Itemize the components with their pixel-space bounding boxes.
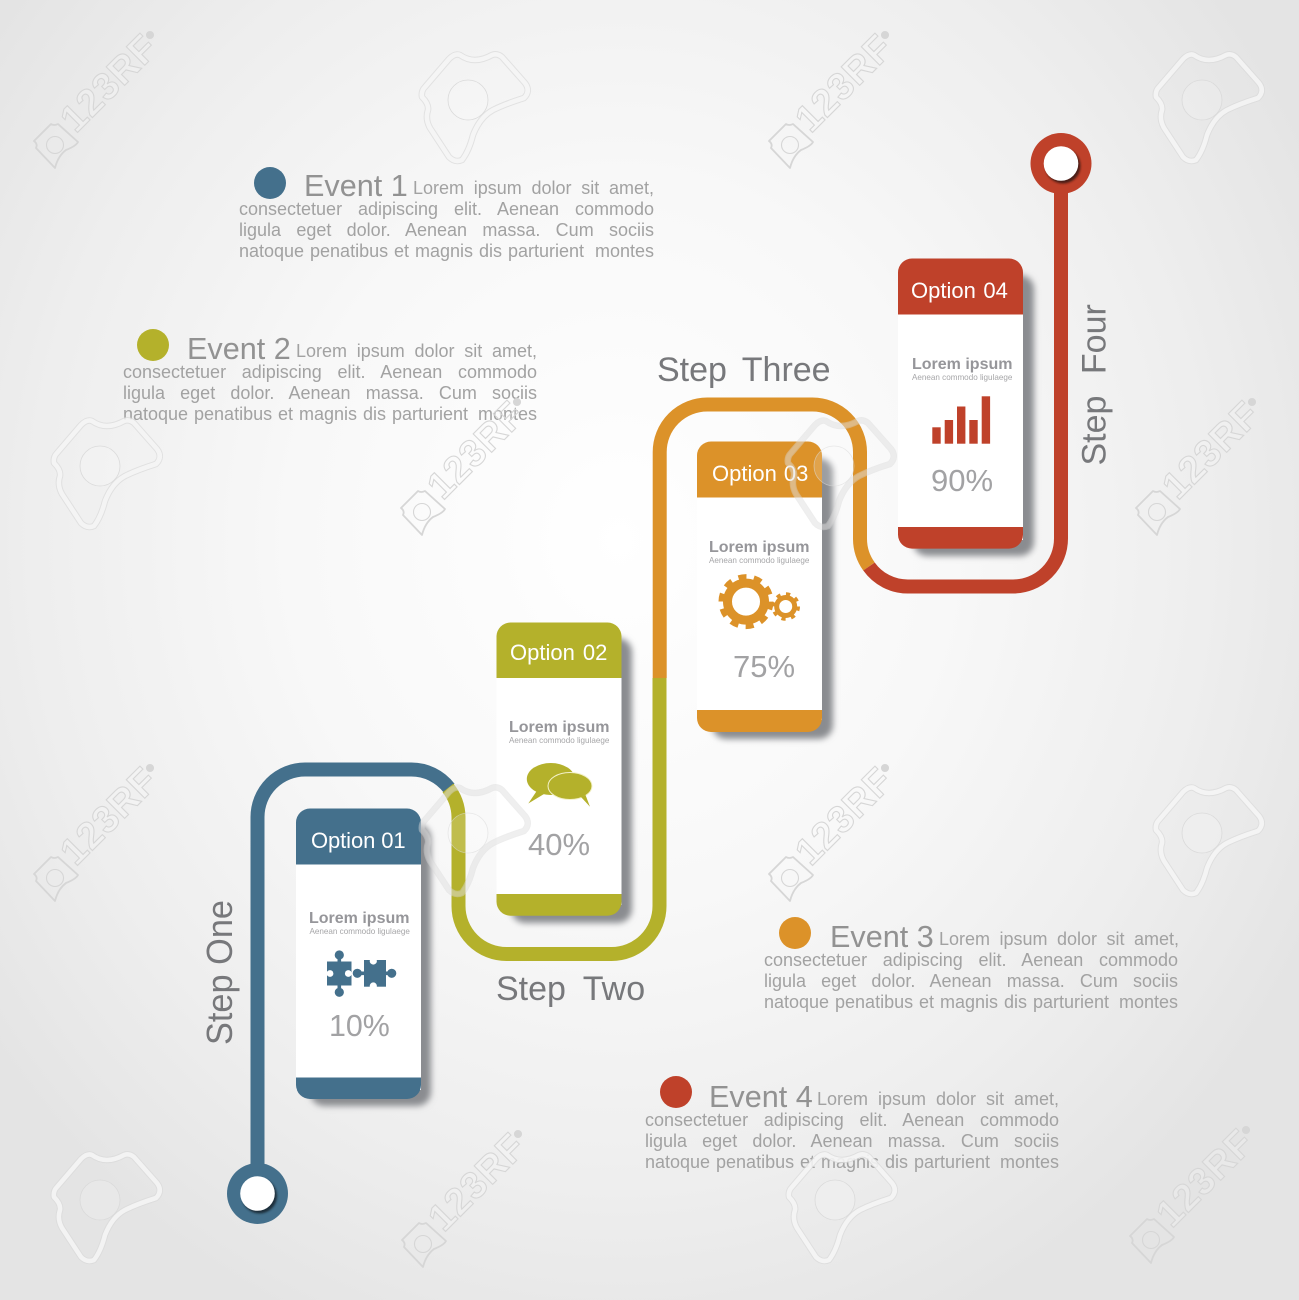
event 3 text block: Lorem ipsum dolor sit amet,	[939, 929, 1179, 949]
event 4 title: Event 4	[709, 1080, 813, 1114]
event 3 text block: consectetuer adipiscing elit. Aenean commodo	[764, 950, 1178, 970]
watermark logo	[34, 27, 166, 168]
icon: puzzle	[327, 950, 396, 997]
path segment: step two (green)	[448, 678, 660, 954]
event 3 title: Event 3	[830, 920, 934, 954]
event 3 text block: natoque penatibus et magnis dis parturient	[764, 992, 1109, 1012]
watermark egg	[54, 1154, 160, 1261]
watermark egg	[788, 420, 894, 527]
watermark logo	[769, 27, 901, 168]
step three label: Step Three	[657, 351, 831, 389]
event 1 text block: consectetuer adipiscing elit. Aenean commodo	[239, 199, 654, 219]
path segment: step three (orange)	[660, 404, 869, 678]
card subheading: Aenean commodo ligulaege	[509, 736, 610, 745]
watermark logo: 123RF	[53, 760, 166, 873]
watermark egg	[422, 54, 528, 161]
event 1 text block: natoque penatibus et magnis dis parturient	[239, 241, 584, 261]
event 4 body	[645, 1089, 1059, 1172]
event 2 text block: ligula eget dolor. Aenean massa. Cum sociis	[123, 383, 537, 403]
watermark logo	[1136, 394, 1268, 535]
watermark egg	[1156, 787, 1262, 894]
event 1 text block: ligula eget dolor. Aenean massa. Cum sociis	[239, 220, 654, 240]
card title: Option 01	[311, 828, 406, 853]
card heading: Lorem ipsum	[309, 910, 409, 927]
event 2 body	[123, 341, 537, 424]
card value: 75%	[733, 649, 795, 684]
end marker	[1030, 133, 1092, 194]
card: option 02	[496, 622, 632, 923]
card heading: Lorem ipsum	[709, 539, 809, 556]
event 4 text block: consectetuer adipiscing elit. Aenean commodo	[645, 1110, 1059, 1130]
event 4 text block: montes	[1000, 1152, 1059, 1172]
watermark logo: 123RF	[421, 1126, 534, 1239]
event 2 text block	[123, 329, 537, 424]
event 4 text block: ligula eget dolor. Aenean massa. Cum sociis	[645, 1131, 1059, 1151]
start marker	[227, 1163, 288, 1224]
event 1 text block	[239, 167, 654, 261]
event 2 text block: natoque penatibus et magnis dis parturient	[123, 404, 468, 424]
card title: Option 02	[510, 640, 607, 665]
event 3 text block	[764, 917, 1179, 1012]
event 4 dot	[660, 1076, 692, 1108]
watermark logo: 123RF	[420, 394, 533, 507]
event 1 text block: montes	[595, 241, 654, 261]
event 2 text block: Lorem ipsum dolor sit amet,	[296, 341, 537, 361]
event 1 title: Event 1	[304, 169, 408, 203]
icon: bar chart	[932, 396, 990, 444]
path segment: step four (red)	[869, 164, 1061, 587]
event 2 dot	[137, 329, 169, 361]
watermark logo	[402, 1126, 534, 1267]
card: option 04	[898, 258, 1034, 556]
watermark egg	[54, 420, 160, 527]
path segment: step one (blue)	[258, 769, 449, 1194]
event 3 dot	[779, 917, 811, 949]
card subheading: Aenean commodo ligulaege	[709, 556, 810, 565]
card subheading: Aenean commodo ligulaege	[310, 927, 410, 936]
card title: Option 04	[911, 278, 1008, 303]
step two label: Step Two	[496, 970, 645, 1008]
watermark logo: 123RF	[53, 27, 166, 140]
watermark logo	[34, 760, 166, 901]
icon: gears	[722, 577, 798, 626]
card value: 10%	[329, 1009, 390, 1043]
event 4 text block: natoque penatibus et magnis dis parturient	[645, 1152, 990, 1172]
watermark egg	[789, 1154, 895, 1261]
event 1 body	[239, 178, 654, 261]
event 3 body	[764, 929, 1179, 1012]
event 4 text block	[645, 1076, 1059, 1172]
card heading: Lorem ipsum	[509, 719, 609, 736]
card value: 90%	[931, 463, 993, 498]
watermark logo: 123RF	[788, 27, 901, 140]
event 1 text block: Lorem ipsum dolor sit amet,	[413, 178, 654, 198]
watermark logo	[769, 760, 901, 901]
event 4 text block: Lorem ipsum dolor sit amet,	[817, 1089, 1059, 1109]
icon: speech bubbles	[527, 763, 592, 807]
card value: 40%	[528, 827, 590, 862]
watermark logo: 123RF	[1155, 394, 1268, 507]
event 2 text block: montes	[478, 404, 537, 424]
watermark logo: 123RF	[788, 760, 901, 873]
event 3 text block: ligula eget dolor. Aenean massa. Cum sociis	[764, 971, 1178, 991]
card heading: Lorem ipsum	[912, 356, 1012, 373]
watermark logo: 123RF	[1149, 1122, 1262, 1235]
watermark egg	[422, 787, 528, 894]
event 2 text block: consectetuer adipiscing elit. Aenean commodo	[123, 362, 537, 382]
card: option 03	[697, 442, 833, 739]
watermark logo	[1130, 1122, 1262, 1263]
event 2 title: Event 2	[187, 332, 291, 366]
watermark logo	[401, 394, 533, 535]
step four label: Step Four	[1076, 304, 1114, 466]
event 1 dot	[254, 167, 286, 199]
card: option 01	[296, 808, 431, 1106]
card subheading: Aenean commodo ligulaege	[912, 373, 1013, 382]
watermark egg	[1156, 54, 1262, 161]
step one label: Step One	[199, 900, 240, 1045]
card title: Option 03	[712, 461, 808, 486]
event 3 text block: montes	[1119, 992, 1178, 1012]
